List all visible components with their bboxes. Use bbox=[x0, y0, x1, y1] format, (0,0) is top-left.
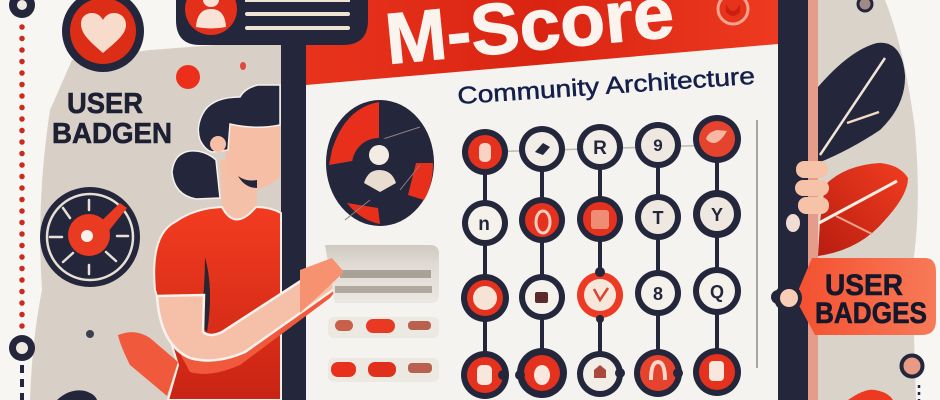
form buttons row 1 bbox=[328, 317, 439, 338]
hand bbox=[795, 161, 829, 214]
subtitle: Community Architecture bbox=[457, 63, 756, 110]
badge network row 2: n bbox=[478, 214, 490, 235]
form card bbox=[325, 245, 439, 303]
left beige panel bbox=[30, 40, 281, 400]
profile card bbox=[176, 0, 368, 45]
form buttons row 2 bbox=[328, 358, 439, 382]
neck bbox=[220, 160, 257, 224]
left pillar bbox=[281, 40, 306, 400]
red banner bbox=[306, 0, 778, 85]
badge network row 3 bbox=[461, 267, 741, 323]
face bbox=[225, 120, 280, 189]
badge network row 1: 9 bbox=[653, 136, 663, 155]
tag: user badges bbox=[774, 258, 936, 335]
icon: gauge bbox=[40, 187, 140, 287]
badge network row 4 bbox=[461, 348, 741, 399]
red dots bbox=[176, 62, 246, 89]
left label: USER bbox=[67, 88, 143, 120]
left hand bbox=[118, 332, 178, 396]
ear bbox=[210, 136, 226, 152]
red shape bottom bbox=[848, 390, 893, 400]
arm bbox=[157, 262, 340, 374]
badge network row 2: Y bbox=[711, 205, 723, 225]
badge network row 3: 8 bbox=[653, 284, 663, 304]
badge network row 1: R bbox=[593, 138, 607, 159]
badge network row 2 bbox=[462, 190, 741, 246]
badge network row 3: Q bbox=[710, 282, 724, 302]
icon: user pie chart bbox=[326, 100, 434, 226]
side knob bbox=[771, 290, 785, 304]
small dots lower right bbox=[918, 385, 920, 400]
mouth bbox=[238, 176, 257, 188]
person torso bbox=[154, 207, 281, 400]
tag: user badges: USER bbox=[825, 269, 903, 302]
badge network row 1 bbox=[462, 115, 741, 175]
dark leaf bbox=[818, 43, 905, 163]
right pillar bbox=[778, 0, 808, 400]
left hair lobe bbox=[172, 151, 220, 199]
hand pointer bbox=[300, 258, 344, 313]
icon: heart badge bbox=[62, 0, 144, 72]
badge network row 2: T bbox=[652, 208, 664, 228]
tag: user badges: BADGES bbox=[815, 297, 927, 330]
right beige panel bbox=[818, 0, 918, 400]
white main panel bbox=[306, 40, 778, 400]
salmon strip bbox=[808, 0, 818, 400]
pillar dot bbox=[786, 214, 800, 232]
top right ring bbox=[858, 0, 872, 11]
node connectors bbox=[485, 145, 717, 380]
sleeve shadow bbox=[200, 257, 210, 332]
red leaf bbox=[818, 163, 908, 256]
top hair bbox=[198, 85, 280, 152]
divider line bbox=[756, 120, 758, 368]
ring lower right bbox=[902, 356, 922, 376]
small dot bbox=[86, 330, 94, 338]
bottom left dark shape bbox=[57, 390, 97, 400]
banner icon bbox=[718, 0, 748, 24]
dotted timeline left bbox=[9, 0, 35, 400]
left label second line: BADGEN bbox=[52, 118, 172, 150]
